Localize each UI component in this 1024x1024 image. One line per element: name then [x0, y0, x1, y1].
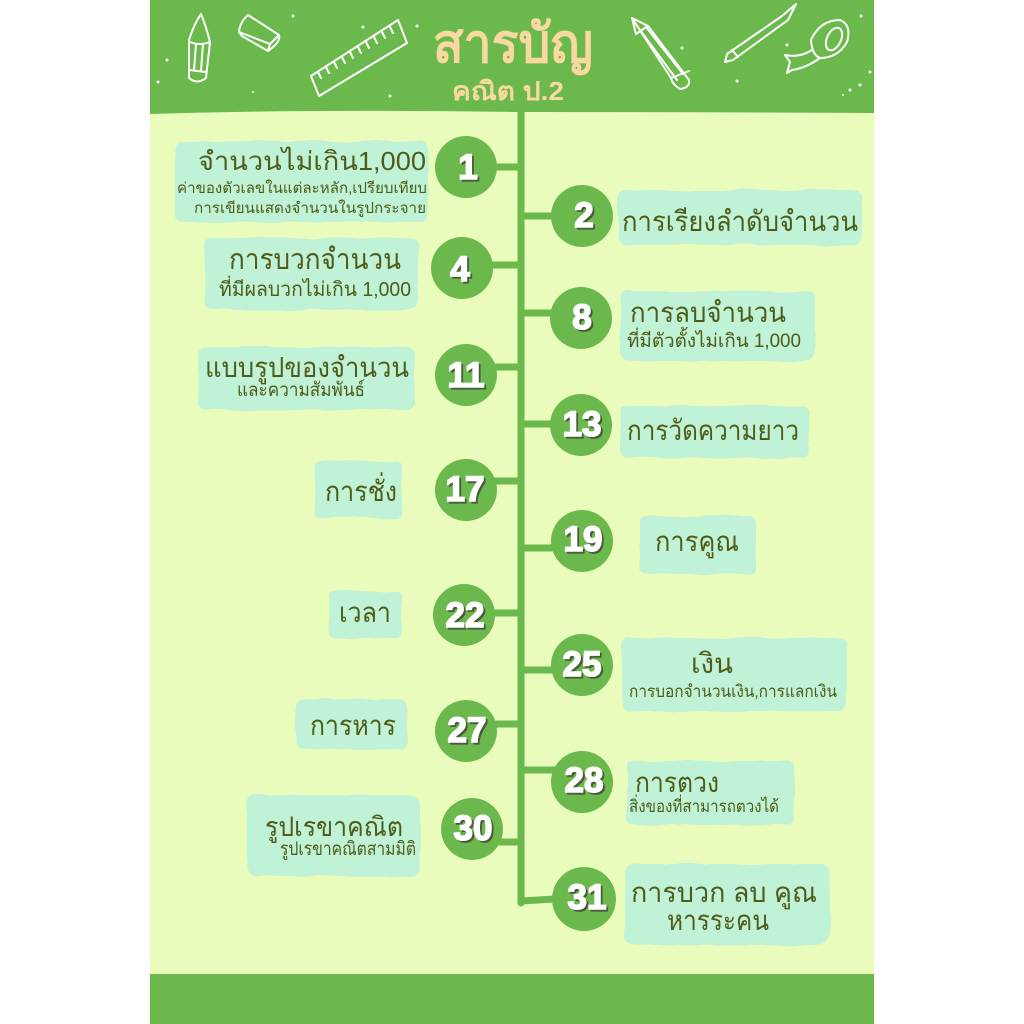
number badge 25: 25 — [565, 647, 603, 686]
icon: pencil left — [189, 14, 210, 82]
item 2 panel: การเรียงลำดับจำนวน — [622, 206, 858, 237]
timeline spine and branches — [490, 112, 555, 903]
number badge 22 — [433, 584, 495, 646]
item 8 panel — [621, 291, 816, 361]
item 4 panel: ที่มีผลบวกไม่เกิน 1,000 — [219, 275, 411, 301]
icon: pencil right — [632, 18, 689, 89]
number badge 4 — [431, 237, 493, 299]
number badge 30 — [441, 798, 503, 860]
subtitle: คณิต ป.2 — [452, 76, 564, 106]
page background — [150, 0, 874, 1024]
number badge 19: 19 — [566, 522, 604, 561]
item 30 panel: รูปเรขาคณิต — [265, 812, 403, 843]
number badge 17: 17 — [446, 470, 484, 509]
number badge 27 — [435, 700, 497, 762]
item 31 panel — [624, 864, 830, 945]
item 28 panel: สิ่งของที่สามารถตวงได้ — [629, 794, 779, 816]
item 4 panel — [205, 238, 419, 310]
item 28 panel: การตวง — [635, 767, 719, 798]
item 31 panel: การบวก ลบ คูณ — [631, 877, 817, 910]
number badge 31: 31 — [568, 878, 606, 917]
number badge 22: 22 — [448, 598, 486, 637]
icon: eraser — [239, 15, 279, 51]
number badge 28 — [551, 751, 613, 813]
number badge 28: 28 — [565, 761, 603, 800]
number badge 13 — [550, 394, 612, 456]
number badge 11: 11 — [450, 358, 486, 397]
number badge 31 — [552, 867, 616, 931]
number badge 2: 2 — [574, 196, 594, 235]
item 19 panel — [640, 516, 755, 574]
item 8 panel: ที่มีตัวตั้งไม่เกิน 1,000 — [627, 327, 801, 352]
item 25 panel: เงิน — [691, 648, 733, 679]
item 30 panel: รูปเรขาคณิตสามมิติ — [280, 839, 416, 860]
number badge 8: 8 — [572, 298, 592, 337]
footer band — [150, 974, 874, 1024]
number badge 11 — [435, 344, 497, 406]
number badge 25 — [551, 634, 613, 696]
item 28 panel — [627, 761, 794, 825]
number badge 8: 8 — [574, 300, 594, 339]
number badge 19 — [551, 510, 613, 572]
number badge 22: 22 — [446, 596, 484, 635]
item 1 panel: จำนวนไม่เกิน1,000 — [198, 146, 426, 176]
header band — [150, 0, 874, 114]
item 1 panel: ค่าของตัวเลขในแต่ละหลัก,เปรียบเทียบ — [177, 179, 427, 197]
item 17 panel: การชั่ง — [325, 472, 397, 507]
item 17 panel — [314, 461, 402, 518]
icon: pen — [725, 4, 796, 62]
item 22 panel: เวลา — [339, 597, 391, 628]
icon: ruler — [311, 20, 407, 96]
number badge 30: 30 — [456, 811, 494, 850]
item 13 panel — [621, 406, 809, 458]
number badge 17 — [435, 459, 497, 521]
item 1 panel — [175, 141, 428, 222]
number badge 2 — [551, 185, 613, 247]
item 11 panel: และความสัมพันธ์ — [237, 379, 365, 401]
item 27 panel — [296, 699, 407, 749]
number badge 4: 4 — [450, 250, 470, 289]
item 31 panel: หารระคน — [667, 905, 769, 936]
header sparkles — [156, 14, 872, 98]
number badge 17: 17 — [448, 472, 486, 511]
item 8 panel: การลบจำนวน — [630, 297, 786, 328]
number badge 13: 13 — [565, 407, 603, 446]
item 1 panel: การเขียนแสดงจำนวนในรูปกระจาย — [194, 199, 426, 217]
number badge 25: 25 — [563, 645, 601, 684]
item 19 panel: การคูณ — [655, 526, 739, 559]
number badge 4: 4 — [452, 252, 472, 291]
number badge 1 — [435, 136, 497, 198]
item 27 panel: การหาร — [310, 710, 396, 741]
number badge 2: 2 — [576, 198, 596, 237]
item 30 panel — [247, 795, 420, 876]
number badge 27: 27 — [450, 713, 488, 752]
item 4 panel: การบวกจำนวน — [229, 244, 401, 276]
item 11 panel: แบบรูปของจำนวน — [205, 352, 409, 385]
title: สารบัญ — [433, 14, 593, 75]
number badge 1: 1 — [458, 148, 478, 187]
number badge 8 — [550, 287, 612, 349]
number badge 19: 19 — [564, 520, 602, 559]
number badge 28: 28 — [567, 763, 605, 802]
number badge 13: 13 — [563, 405, 601, 444]
item 25 panel: การบอกจำนวนเงิน,การแลกเงิน — [629, 682, 837, 701]
number badge 1: 1 — [460, 150, 480, 189]
number badge 11: 11 — [448, 356, 484, 395]
item 2 panel — [618, 190, 862, 245]
item 22 panel — [329, 591, 402, 638]
item 11 panel — [198, 347, 415, 410]
number badge 27: 27 — [448, 711, 486, 750]
icon: tape — [785, 20, 848, 73]
number badge 30: 30 — [454, 809, 492, 848]
item 25 panel — [622, 638, 847, 711]
number badge 31: 31 — [570, 880, 608, 919]
item 13 panel: การวัดความยาว — [627, 415, 799, 446]
